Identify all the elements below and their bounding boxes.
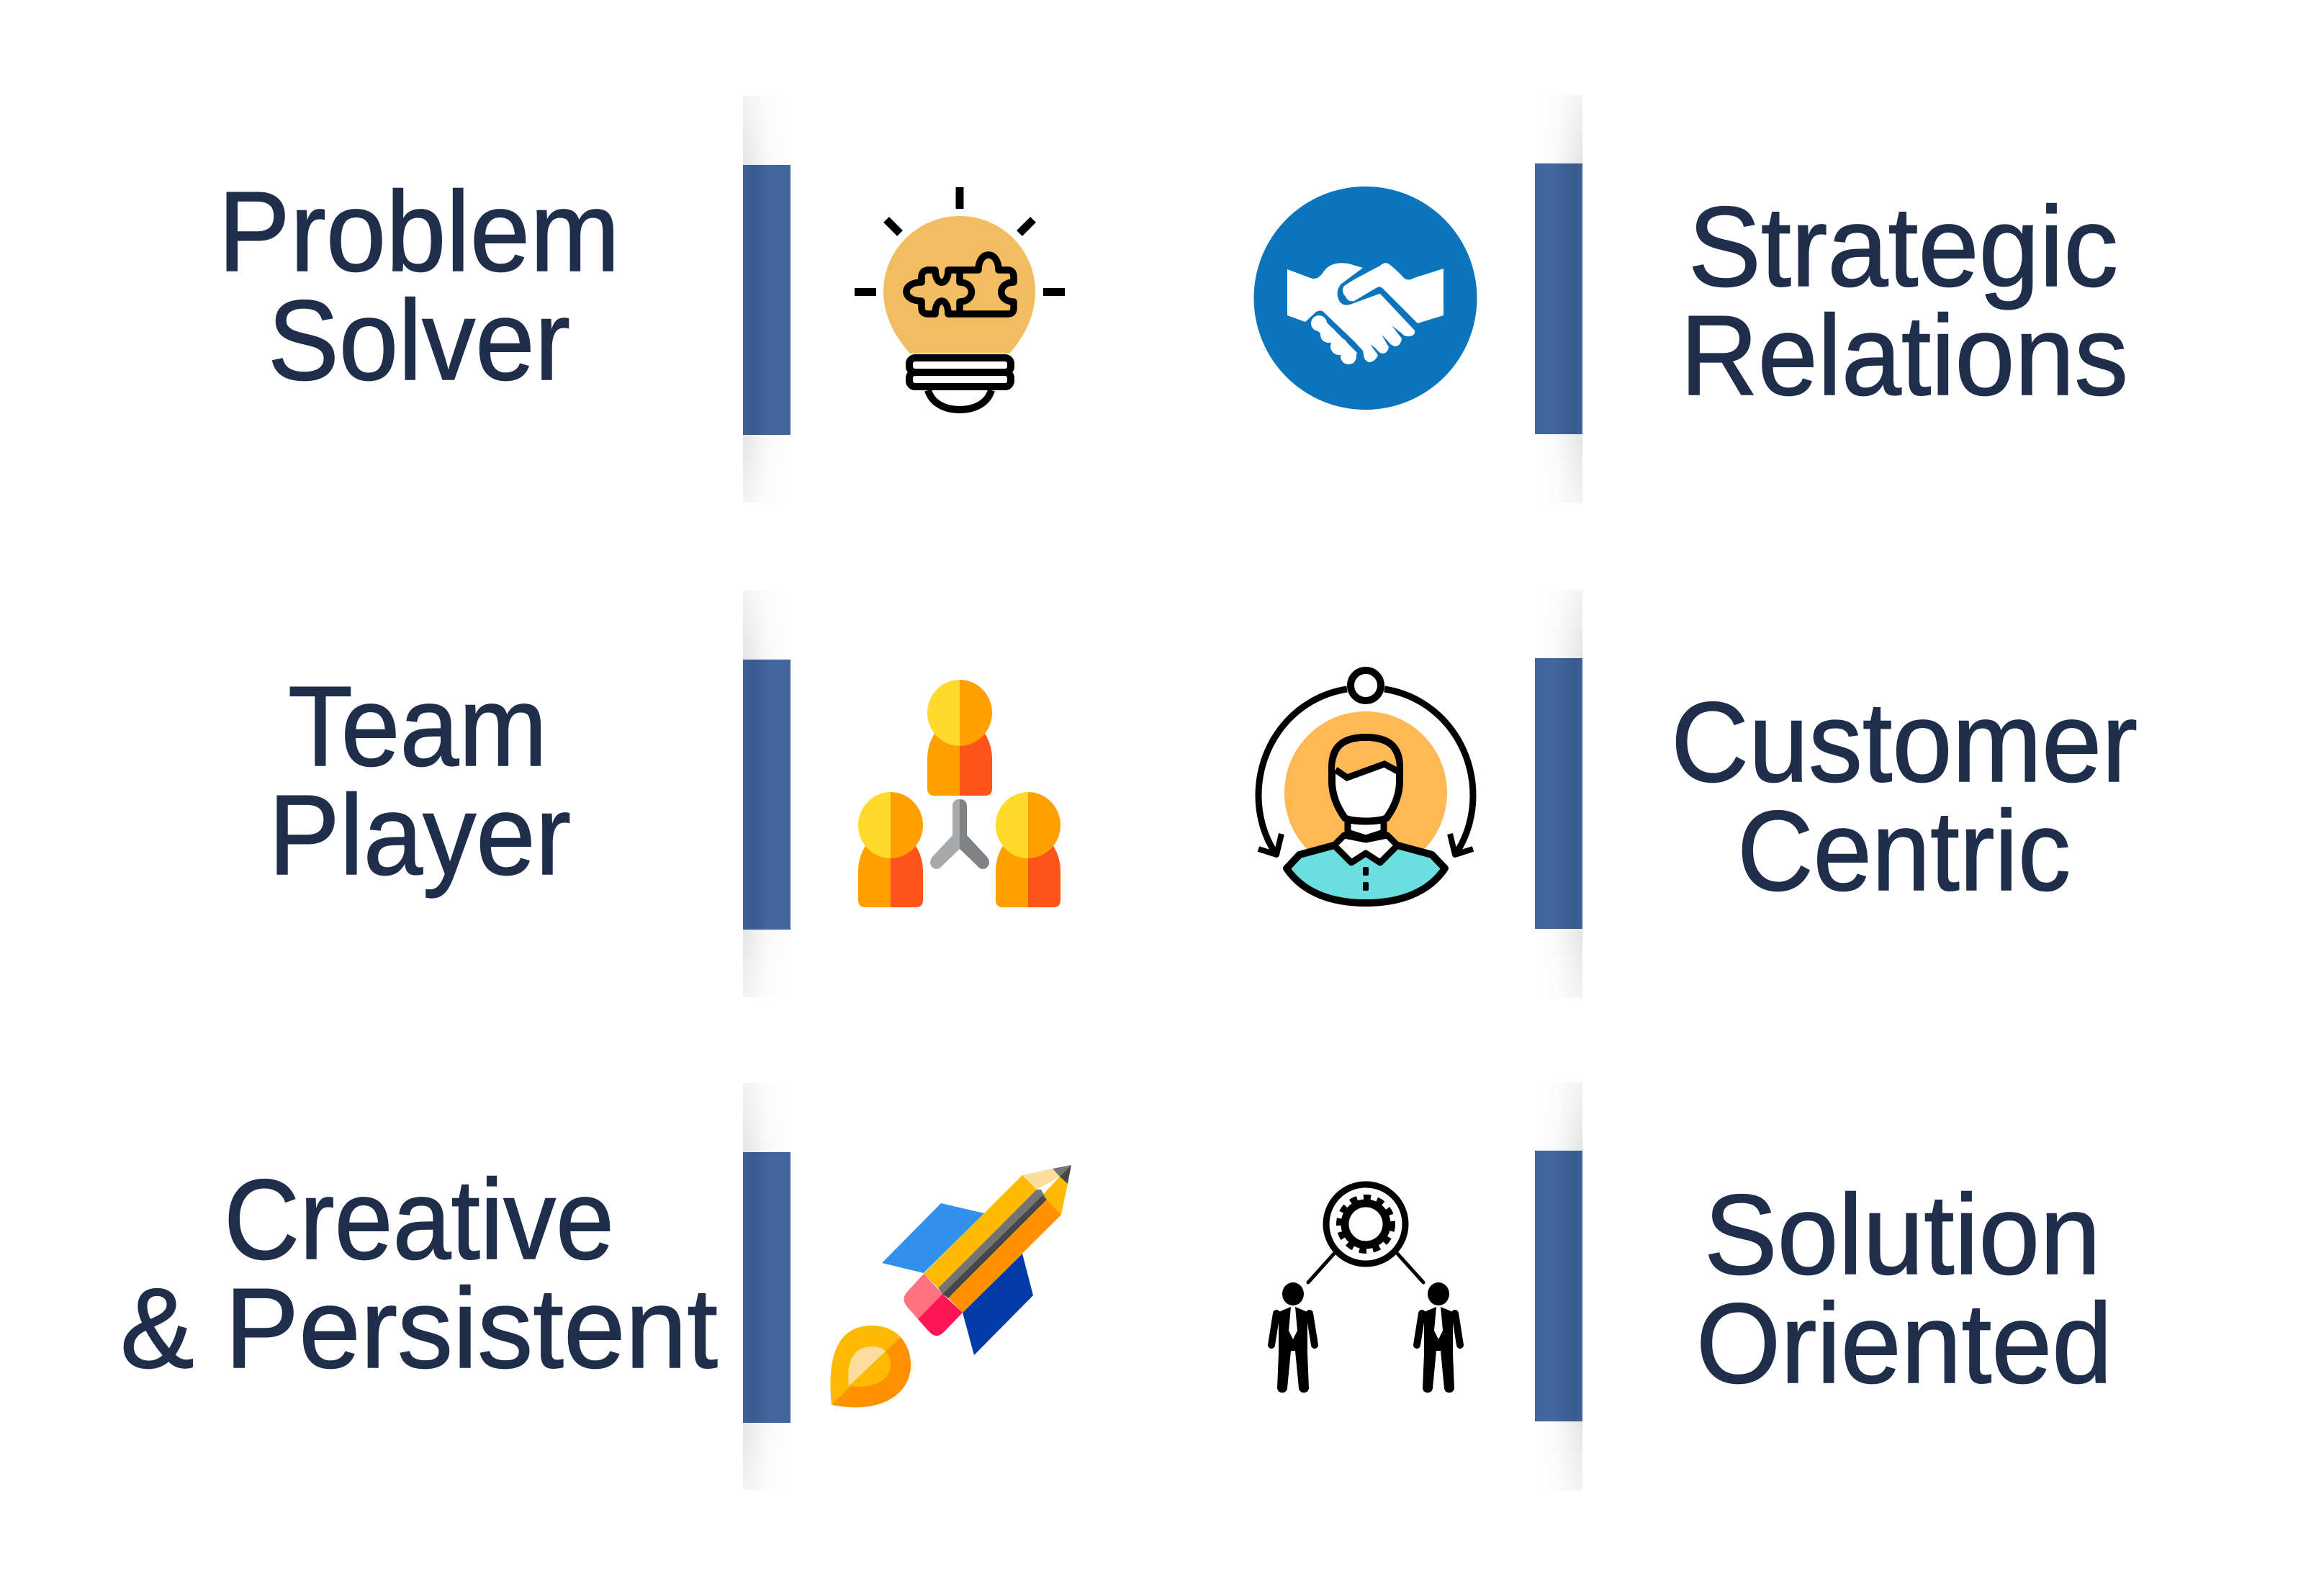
icon: two people and a gear [1271, 1184, 1460, 1393]
heading: Strategic Relations: Relations [1680, 292, 2128, 419]
panel: Solution Oriented [1271, 1082, 2112, 1491]
divider bar [743, 590, 791, 997]
heading: Problem Solver: Problem [218, 168, 620, 295]
heading: Customer Centric: Customer [1671, 679, 2138, 806]
heading: Strategic Relations: Strategic [1688, 184, 2118, 310]
heading: Creative & Persistent: & Persistent [120, 1265, 718, 1392]
divider bar [1535, 1082, 1582, 1491]
divider bar [743, 1083, 791, 1490]
panel: Creative & Persistent [120, 1083, 1071, 1490]
panel: Strategic Relations [1254, 95, 2128, 503]
heading: Team Player [269, 663, 571, 899]
icon: pencil rocket [821, 1165, 1071, 1416]
heading: Problem Solver: Solver [268, 277, 570, 404]
heading: Customer Centric [1671, 679, 2138, 914]
heading: Strategic Relations [1680, 184, 2128, 419]
icon: handshake [1254, 186, 1477, 410]
divider bar [743, 96, 791, 503]
divider bar [1535, 590, 1582, 998]
panel: Customer Centric [1258, 590, 2138, 998]
heading: Solution Oriented: Solution [1704, 1172, 2101, 1298]
heading: Solution Oriented: Oriented [1696, 1280, 2112, 1407]
panel: Team Player [269, 590, 1060, 997]
heading: Solution Oriented [1696, 1172, 2112, 1407]
icon: customer in circular arrows [1258, 670, 1473, 903]
icon: team of three people [858, 680, 1060, 907]
heading: Problem Solver [218, 168, 620, 404]
heading: Creative & Persistent [120, 1156, 718, 1392]
heading: Team Player: Player [269, 772, 571, 899]
icon: light bulb with puzzle piece [855, 187, 1065, 410]
heading: Creative & Persistent: Creative [224, 1156, 614, 1283]
heading: Team Player: Team [288, 663, 547, 790]
divider bar [1535, 95, 1582, 503]
heading: Customer Centric: Centric [1737, 788, 2071, 914]
panel: Problem Solver [218, 96, 1065, 503]
